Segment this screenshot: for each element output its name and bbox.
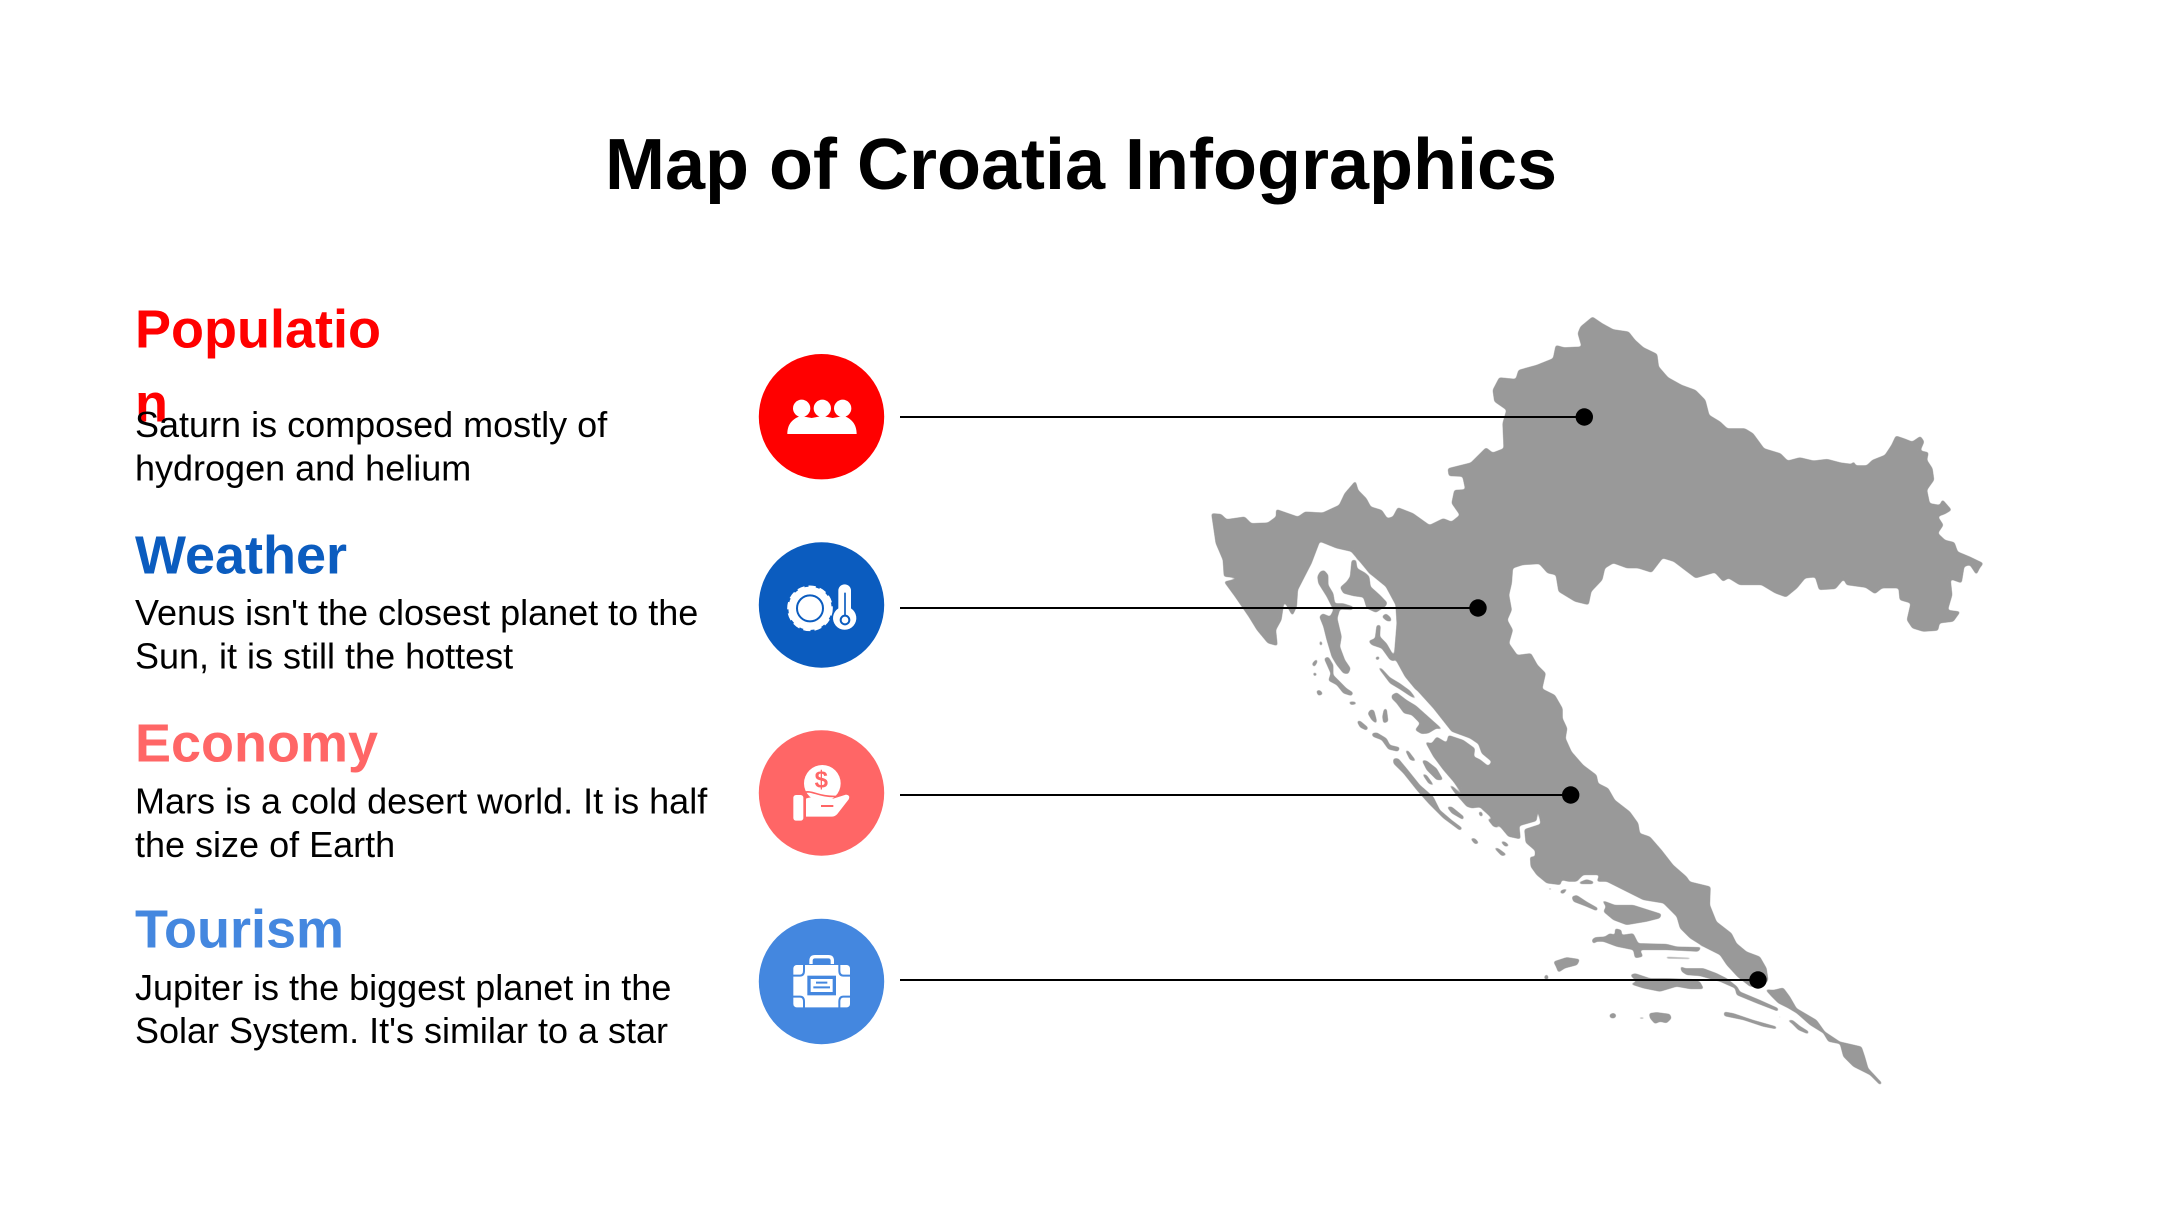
title: Map of Croatia Infographics xyxy=(605,125,1557,205)
map of Croatia xyxy=(1211,317,1984,1085)
text block: tourism: Jupiter is the biggest planet in the xyxy=(135,967,671,1008)
heading: tourism: Tourism xyxy=(135,899,344,959)
text block: economy: Mars is a cold desert world. It is half xyxy=(135,781,708,822)
connector: tourism xyxy=(900,971,1767,989)
text block: population: hydrogen and helium xyxy=(135,447,471,488)
heading: economy: Economy xyxy=(135,713,378,773)
text block: weather: Venus isn't the closest planet to the xyxy=(135,592,698,633)
icon: hand holding coin on salmon circle: $ xyxy=(815,767,828,794)
connector: economy xyxy=(900,786,1579,804)
text block: tourism: Solar System. It's similar to a star xyxy=(135,1010,668,1051)
connector: population xyxy=(900,408,1593,426)
icon: hand holding coin on salmon circle xyxy=(759,730,884,856)
icon: gear and thermometer on blue circle xyxy=(759,542,884,668)
panel: tourism xyxy=(135,899,671,1051)
icon: people on red circle xyxy=(759,354,884,479)
text block: weather: Sun, it is still the hottest xyxy=(135,636,513,677)
heading: population: Populatio xyxy=(135,300,381,360)
heading overflow letter: n xyxy=(135,374,168,434)
panel: population xyxy=(135,300,608,488)
text block: population: Saturn is composed mostly of xyxy=(135,404,608,445)
text block: economy: the size of Earth xyxy=(135,824,395,865)
panel: economy xyxy=(135,713,708,865)
icon: suitcase on blue circle xyxy=(759,919,884,1044)
panel: weather xyxy=(135,525,698,677)
connector: weather xyxy=(900,599,1487,617)
heading: weather: Weather xyxy=(135,525,347,585)
